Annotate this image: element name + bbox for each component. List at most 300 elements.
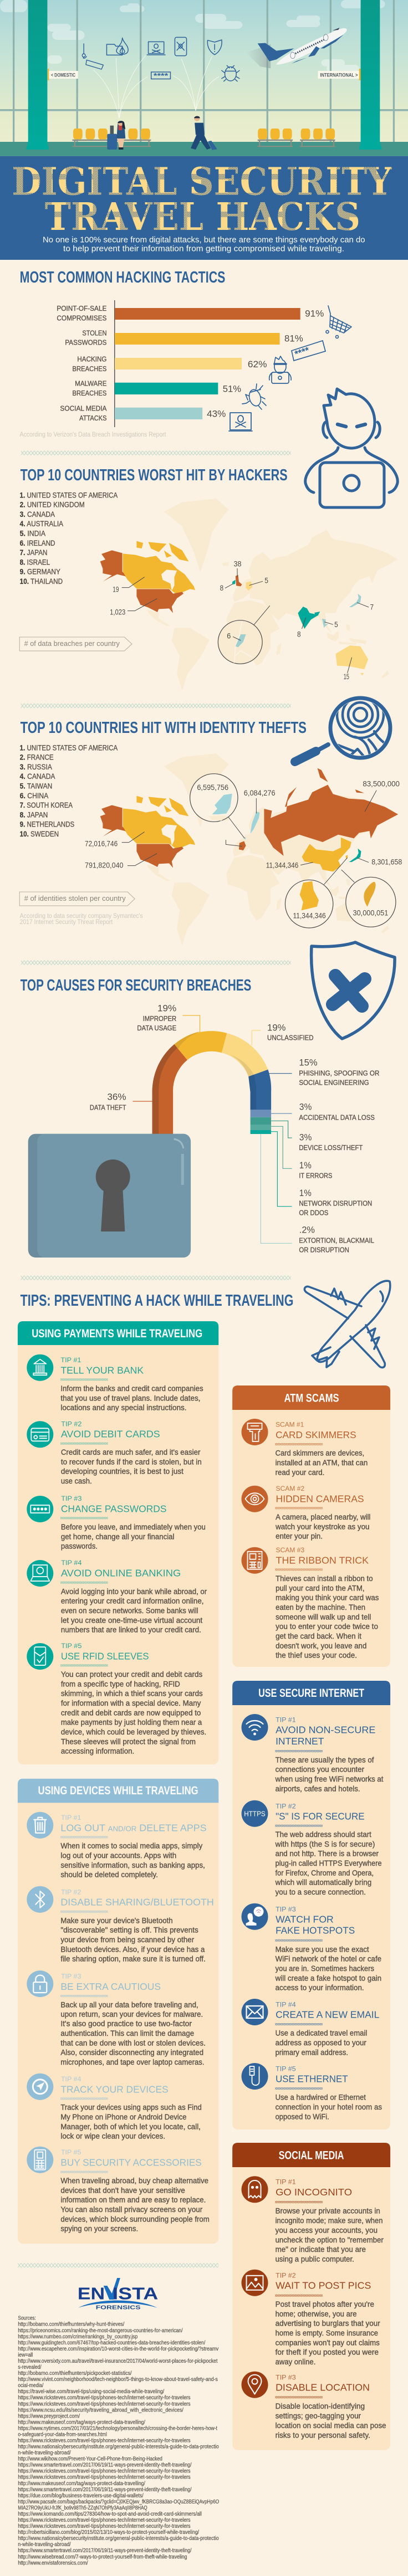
section: countries hit with identity thefts [19, 718, 402, 946]
illustration: big hacker [305, 389, 397, 507]
subtitle: to help prevent their information from getting compromised while traveling. [63, 245, 344, 253]
sources list: http://www.nationalcybersecurityinstitute.org/general-public-interests/a-guide-to-data-protectio [18, 2535, 219, 2542]
heading: TOP CAUSES FOR SECURITY BREACHES [21, 976, 251, 994]
tip 5: use rfid sleeves: skimming, in which a thief scans your cards [61, 1690, 203, 1698]
inset: taiwan [341, 870, 396, 927]
tip 1: avoid non-secure internet: airports, cafes and hotels. [276, 1785, 360, 1793]
tip 2: wait to post pics: Post travel photos after you're [276, 2300, 374, 2309]
chart labels: DATA USAGE [137, 1025, 176, 1033]
source note: 2017 Internet Security Threat Report [20, 918, 113, 926]
sources list: https://priceonomics.com/ranking-the-most-dangerous-countries-for-american/ [18, 2327, 183, 2333]
tip 1: go incognito: using a public computer. [276, 2255, 354, 2264]
icon: https badge: HTTPS [244, 1810, 266, 1818]
heading: TOP 10 COUNTRIES HIT WITH IDENTITY THEFTS [21, 718, 307, 736]
tip 3: be extra cautious: BE EXTRA CAUTIOUS [60, 1982, 161, 1992]
tip 3: disable location: risks to your personal safety. [276, 2431, 370, 2440]
icon: phone handset [27, 2147, 53, 2173]
tip 1: tell your bank [27, 1354, 203, 1413]
tip 4: avoid online banking: let you create one-time-use virtual account [61, 1617, 202, 1625]
tip 5: use rfid sleeves: credit and debit cards are now equipped to [61, 1709, 201, 1717]
sources list: MIA27RO9yUkU-frJfK_bo9v98Th5-ZZqN7OhPfy3AaAqII8P8HAQ [18, 2505, 147, 2511]
tip 2: disable sharing/bluetooth: DISABLE SHARING/BLUETOOTH [60, 1897, 214, 1907]
tip 3: change passwords: get home, change all your financial [61, 1533, 174, 1541]
icon: bank [27, 1354, 53, 1381]
tip 2: s is for secure: and not http. There is a browser [276, 1850, 379, 1859]
tip 5: use rfid sleeves: USE RFID SLEEVES [61, 1651, 149, 1661]
icon: online bank [27, 1560, 53, 1587]
legend tag: data breaches: # of data breaches per country [24, 640, 120, 648]
scam 1: card skimmers: read your card. [276, 1469, 324, 1477]
tip 3: watch for fake hotspots: WATCH FOR [276, 1914, 334, 1925]
scam 2: hidden cameras: A camera, placed nearby, will [276, 1513, 370, 1522]
scam 3: the ribbon trick: the thief uses your code. [276, 1651, 357, 1660]
icon: ethernet cable [242, 2063, 268, 2090]
tip 1: avoid non-secure internet: connections you encounter [276, 1766, 365, 1774]
icon: trash can [27, 1812, 53, 1839]
panel header [18, 1321, 218, 1345]
sources list: http://www.makeuseof.com/tag/ways-protect-data-travelling/ [18, 2419, 146, 2425]
tip 4: create a new email: address as opposed to your [276, 2039, 367, 2048]
logo: envista forensics: EN [78, 2285, 105, 2303]
tip 3: be extra cautious: upon return, scan your devices for malware. [60, 2010, 203, 2019]
tip 3: disable location: DISABLE LOCATION [276, 2382, 370, 2393]
world map: data breaches: 1,023 [110, 608, 125, 617]
tip 4: create a new email [242, 1999, 380, 2057]
chart labels: DEVICE LOSS/THEFT [299, 1145, 363, 1152]
sources list: https://www.ricksteves.com/travel-tips/phones-tech/internet-security-for-travelers [18, 2394, 191, 2401]
sources list: http://www.pacsafe.com/bags/backpacks/?gclid=Cj0KEQjwv_fKBRCG8a3ao-OQuZ8BEiQAvpHp6O [18, 2498, 219, 2505]
tip 5: buy security accessories: TIP #5 [61, 2149, 81, 2156]
tip 2: avoid debit cards: AVOID DEBIT CARDS [61, 1429, 160, 1440]
tip 3: be extra cautious: It's also good practice to use two-factor [60, 2020, 192, 2029]
ranked list: 2. FRANCE [20, 753, 54, 762]
title line 1: DIGITAL SECURITY [12, 160, 392, 204]
chart labels: SOCIAL ENGINEERING [299, 1079, 369, 1087]
callout lines [132, 1015, 292, 1243]
scam 3: the ribbon trick: you to enter your code twice to [276, 1623, 378, 1631]
ranked list: 10. SWEDEN [20, 830, 59, 839]
logo: envista forensics [78, 2278, 158, 2311]
chart labels: .2% [299, 1224, 315, 1235]
tip 1: log out and/or delete apps: log out of your accounts. Apps with [60, 1851, 176, 1860]
tip 2: disable sharing/bluetooth: TIP #2 [61, 1889, 81, 1896]
icon: tilted password box: **** [293, 345, 311, 360]
sources list: n-while-traveling-abroad/ [18, 2541, 72, 2548]
sources list: http://www.nationalcybersecurityinstitute.org/general-public-interests/a-guide-to-data-protectio [18, 2444, 219, 2450]
tip 1: log out and/or delete apps: sensitive information, such as banking apps, [60, 1861, 205, 1870]
bar chart [57, 300, 324, 427]
world map: identity thefts: 11,344,346 [266, 861, 299, 870]
tip 2: s is for secure: with https (the S is for secure) [274, 1840, 375, 1849]
tip 5: buy security accessories: When traveling abroad, buy cheap alternative [60, 2177, 208, 2185]
tip 5: use rfid sleeves: These sleeves will protect the signal from [61, 1738, 196, 1746]
ranked list: 6. IRELAND [20, 539, 55, 548]
tip 5: buy security accessories [27, 2147, 210, 2234]
scam 1: card skimmers: CARD SKIMMERS [276, 1430, 356, 1440]
section: countries worst hit by hackers [19, 465, 398, 691]
subtitle [43, 236, 365, 253]
title band [0, 156, 408, 260]
world map: data breaches: 5 [264, 577, 268, 586]
tip 5: use ethernet: connection in your hotel room as [276, 2103, 382, 2112]
tip 1: go incognito: Browse your private accounts in [276, 2207, 380, 2216]
bar chart: STOLEN [82, 330, 106, 337]
ranked list: 9. GERMANY [20, 568, 60, 577]
tip 1: avoid non-secure internet: These are usually the types of [276, 1756, 374, 1764]
icon: rfid sleeve [27, 1643, 53, 1670]
tip 5: use rfid sleeves: accessing information. [61, 1747, 134, 1756]
icon: bluetooth [27, 1886, 53, 1913]
panel header [232, 1681, 390, 1705]
tip 3: be extra cautious: authentication. This can limit the damage [60, 2029, 194, 2038]
world map: identity thefts: 11,344,346 [293, 912, 326, 920]
tip 1: go incognito: you access your accounts, you [276, 2226, 378, 2235]
tip 4: avoid online banking: Avoid logging into your bank while abroad, or [61, 1588, 207, 1596]
sources list: http://www.wisebread.com/7-ways-to-protect-yourself-from-theft-while-traveling [18, 2553, 187, 2560]
bar chart: 62% [248, 359, 267, 370]
panel: use secure internet [232, 1681, 390, 2129]
tip 1: tell your bank: Inform the banks and credit card companies [60, 1384, 203, 1393]
sources list: https://www.ricksteves.com/travel-tips/phones-tech/internet-security-for-travelers [18, 2400, 191, 2407]
header illustration: airport terminal [0, 0, 408, 156]
chart labels: 1% [299, 1188, 312, 1198]
tip 3: disable location: Disable location-identifying [276, 2402, 365, 2411]
scam 2: hidden cameras: SCAM #2 [276, 1485, 304, 1492]
chart labels: 1% [299, 1160, 312, 1171]
section: top causes for security breaches [21, 976, 379, 1258]
scam 2: hidden cameras: watch your keystroke as you [275, 1523, 370, 1531]
sources list: https://www.ricksteves.com/travel-tips/phones-tech/internet-security-for-travelers [18, 2468, 191, 2474]
ranked list: 2. UNITED KINGDOM [20, 501, 85, 509]
scam 3: the ribbon trick: doesn't work, you leave and [276, 1642, 367, 1650]
heading: MOST COMMON HACKING TACTICS [20, 268, 225, 286]
logo: envista forensics: FORENSICS [96, 2305, 140, 2311]
chart labels: ACCIDENTAL DATA LOSS [299, 1114, 375, 1122]
tip 2: s is for secure: which will automatically bring [274, 1879, 371, 1887]
scam 3: the ribbon trick: SCAM #3 [276, 1547, 304, 1554]
world map: data breaches: 38 [234, 560, 242, 569]
icon: password field: **** [154, 73, 168, 80]
tip 3: be extra cautious: that can be done with lost or stolen devices. [60, 2039, 206, 2048]
tip 2: wait to post pics: TIP #2 [276, 2272, 296, 2279]
panel header: USING DEVICES WHILE TRAVELING [38, 1784, 198, 1797]
tip 3: watch for fake hotspots: FAKE HOTSPOTS [276, 1925, 355, 1936]
icon: small hacker [269, 356, 291, 383]
tip 5: use rfid sleeves: from a specific type of hacking, RFID [61, 1680, 180, 1689]
icon: phishing hook with password tag [82, 44, 103, 69]
sources list: http://robertsicillano.com/blog/2015/02/13/10-ways-to-protect-yourself-while-traveling/ [18, 2529, 200, 2536]
tip 2: s is for secure: plug-in called HTTPS Everywhere [276, 1859, 382, 1868]
scam 3: the ribbon trick: Thieves can install a ribbon to [276, 1574, 373, 1583]
tip 3: change passwords: CHANGE PASSWORDS [61, 1503, 166, 1514]
world map: data breaches: 15 [344, 673, 349, 681]
sources list: ocial-media/ [18, 2382, 44, 2389]
icon: bug [222, 65, 239, 81]
panel header: USING PAYMENTS WHILE TRAVELING [32, 1327, 202, 1340]
connection lines [94, 55, 219, 118]
illustration: airplane outline [304, 1281, 390, 1367]
bar chart: MALWARE [75, 380, 107, 388]
ranked list: 3. CANADA [20, 510, 55, 519]
icon: map pin [242, 2372, 268, 2398]
illustration: shield with x [312, 942, 395, 1039]
icon: laptop with skull [147, 42, 165, 55]
tip 2: disable sharing/bluetooth: your device from being scanned by other [60, 1936, 195, 1944]
tip 1: tell your bank: TELL YOUR BANK [60, 1365, 144, 1376]
chart labels: 36% [107, 1091, 126, 1102]
tip 4: avoid online banking: entering your credit card information online, [61, 1597, 204, 1606]
tip 3: change passwords [27, 1495, 206, 1551]
padlock chart: shackle segments [152, 1031, 271, 1134]
tip 2: s is for secure: The web address should start [276, 1830, 371, 1839]
tip 2: avoid debit cards: Credit cards are much safer, and it's easier [61, 1448, 201, 1457]
tip 3: change passwords: Before you leave, and immediately when you [61, 1523, 206, 1532]
tip 5: use rfid sleeves: You can protect your credit and debit cards [61, 1670, 202, 1679]
chart labels: 19% [267, 1022, 286, 1033]
logo: envista forensics: ISTA [113, 2285, 158, 2303]
tip 1: avoid non-secure internet: when using free WiFi networks at [274, 1775, 383, 1784]
world map: identity thefts: 6,595,756 [197, 783, 228, 792]
icon: https badge [242, 1800, 268, 1827]
tip 1: tell your bank: TIP #1 [60, 1357, 81, 1364]
world map: data breaches: 6 [227, 632, 231, 641]
panel header: USE SECURE INTERNET [258, 1687, 364, 1700]
tip 3: watch for fake hotspots: Make sure you use the exact [276, 1946, 369, 1954]
ranked list: 5. INDIA [20, 530, 45, 538]
tip 2: s is for secure: for Firefox, Chrome and Opera, [276, 1869, 374, 1877]
sources list: http://www.oversixty.com.au/travel/travel-insurance/2017/04/world-worst-places-for-pickpocket [18, 2358, 218, 2364]
ranked list: 7. JAPAN [20, 549, 47, 557]
icon: password dots [27, 1496, 53, 1522]
tip 2: s is for secure: TIP #2 [276, 1803, 296, 1810]
sources list: https://www.smartertravel.com/2017/06/19/11-ways-prevent-identity-theft-traveling/ [18, 2462, 192, 2468]
tip 5: use rfid sleeves: TIP #5 [61, 1643, 81, 1650]
tip 5: use ethernet: Use a hardwired or Ethernet [276, 2093, 366, 2102]
tip 2: avoid debit cards: use cash. [61, 1477, 92, 1486]
bar chart: 81% [284, 333, 303, 344]
panel: atm scams [232, 1386, 390, 1667]
tip 4: track your devices: My Phone on iPhone or Android Device [60, 2113, 187, 2122]
tip 4: avoid online banking [27, 1559, 207, 1635]
ranked list: 8. JAPAN [20, 811, 48, 819]
sources list: https://www.ricksteves.com/travel-tips/phones-tech/internet-security-for-travelers [18, 2438, 191, 2444]
scam 1: card skimmers: SCAM #1 [276, 1421, 304, 1428]
ranked list: 3. RUSSIA [20, 763, 52, 772]
scam 3: the ribbon trick: eaten by the machine. Then [276, 1603, 365, 1612]
icon: shopping cart [326, 306, 351, 338]
tip 1: go incognito: uncheck the option to "remember [276, 2236, 384, 2245]
ranked list [20, 491, 118, 586]
sources list: https://due.com/blog/business-travelers-use-digital-wallets/ [18, 2492, 144, 2498]
tip 2: s is for secure: "S" IS FOR SECURE [276, 1811, 365, 1821]
bar chart: 91% [305, 308, 324, 319]
icon: password field [151, 72, 170, 80]
sources list: https://www.nytimes.com/2017/03/21/technology/personaltech/crossing-the-border-heres-how-t [18, 2425, 218, 2431]
chart labels: EXTORTION, BLACKMAIL [299, 1237, 374, 1245]
scam 3: the ribbon trick: get the card back. When it [276, 1632, 361, 1641]
sources list: http://bobarno.com/thiefhunters/why-hunt-thieves/ [18, 2321, 125, 2327]
bar chart: COMPROMISES [57, 315, 107, 322]
column left [26, 0, 49, 150]
world map: identity thefts: 8,301,658 [371, 858, 402, 867]
ranked list: 10. THAILAND [20, 577, 63, 586]
scam 2: hidden cameras [242, 1485, 370, 1541]
tip 4: track your devices: TRACK YOUR DEVICES [60, 2084, 169, 2095]
chart labels: OR DDOS [299, 1209, 329, 1218]
tip 5: use ethernet: USE ETHERNET [276, 2074, 348, 2085]
sources list: https://www.numbeo.com/crime/rankings_by_country.jsp [18, 2333, 137, 2339]
ranked list: 1. UNITED STATES OF AMERICA [20, 491, 118, 500]
world map: identity thefts: 6,084,276 [244, 789, 276, 798]
tip 1: log out and/or delete apps: should be deleted completely. [60, 1871, 158, 1880]
bar chart: BREACHES [72, 366, 107, 373]
tip 2: wait to post pics: away online. [276, 2358, 315, 2367]
sign: international [318, 69, 361, 80]
legend tag: identities: # of identities stolen per country [24, 895, 126, 903]
sources list [18, 2315, 219, 2566]
world map: identity thefts: 30,000,051 [353, 909, 388, 917]
world map: data breaches: 19 [113, 586, 119, 594]
world map: data breaches [100, 499, 398, 691]
sources list: https://www.ricksteves.com/travel-tips/phones-tech/internet-security-for-travelers [18, 2517, 191, 2523]
scam 3: the ribbon trick: making you think your card was [276, 1594, 379, 1603]
icon: wifi [242, 1714, 268, 1741]
icon: card skimmer [242, 1419, 268, 1445]
ranked list: 4. AUSTRALIA [20, 520, 63, 528]
tip 4: track your devices: Manager, both of which let you locate, call, [60, 2123, 201, 2131]
icon: ghost [242, 2176, 268, 2203]
bar chart: ATTACKS [79, 415, 107, 423]
tip 4: avoid online banking: TIP #4 [61, 1559, 81, 1567]
tip 3: be extra cautious: Back up all your data before traveling and, [60, 2001, 198, 2009]
panel header [232, 2143, 390, 2167]
icon: hacked phone [175, 37, 187, 56]
sources list: o-safeguard-your-data-from-searches.html [18, 2431, 107, 2438]
tip 4: create a new email: Use a dedicated travel email [276, 2029, 367, 2038]
section: tips heading: TIPS: PREVENTING A HACK WHILE TRAVELING [21, 1291, 293, 1309]
scam 3: the ribbon trick [242, 1547, 379, 1660]
chart labels: 3% [299, 1132, 312, 1142]
icon: eye [242, 1486, 268, 1512]
scam 1: card skimmers: installed at an ATM, that can [276, 1459, 368, 1467]
tip 4: track your devices: TIP #4 [61, 2076, 81, 2083]
column right [359, 0, 382, 150]
tip 5: buy security accessories: devices that don't have your sensitive [60, 2187, 185, 2195]
icon: atm keypad [242, 1547, 268, 1574]
tip 4: avoid online banking: even on secure networks. Some banks will [61, 1607, 198, 1615]
tip 1: tell your bank: locations and any special instructions. [60, 1404, 187, 1413]
tip 2: disable sharing/bluetooth: Bluetooth devices. Also, if your device has a [60, 1946, 205, 1954]
chart labels [90, 1003, 379, 1255]
tip 3: disable location [242, 2372, 386, 2440]
illustration: fingerprint magnifier [295, 691, 390, 762]
panel header: SOCIAL MEDIA [279, 2149, 344, 2162]
tip 2: disable sharing/bluetooth [27, 1886, 214, 1964]
icon: padlock [27, 1971, 53, 1997]
icon: folder on fire [106, 38, 128, 55]
sources list: iew=all [18, 2352, 33, 2358]
tip 2: wait to post pics: advertising to burglars that your [276, 2320, 380, 2328]
tip 2: avoid debit cards [27, 1420, 202, 1486]
sources list: n-while-traveling-abroad/ [18, 2450, 72, 2456]
icon: small bug [242, 384, 266, 409]
inset: netherlands [190, 774, 244, 838]
chart labels: PHISHING, SPOOFING OR [299, 1070, 379, 1078]
scam 1: card skimmers [242, 1419, 368, 1477]
tip 2: avoid debit cards: TIP #2 [61, 1420, 81, 1428]
tip 1: log out and/or delete apps: TIP #1 [61, 1814, 81, 1821]
bar chart: PASSWORDS [65, 339, 107, 347]
tip 1: avoid non-secure internet [242, 1714, 383, 1793]
ranked list: 7. SOUTH KOREA [20, 802, 73, 810]
tip 5: use ethernet: opposed to WiFi. [276, 2113, 329, 2121]
section: most common hacking tactics [20, 268, 351, 438]
sign: domestic: < DOMESTIC [51, 72, 76, 78]
tip 1: go incognito: TIP #1 [276, 2178, 296, 2185]
tip 5: use rfid sleeves [27, 1643, 206, 1756]
tip 1: avoid non-secure internet: TIP #1 [276, 1716, 296, 1723]
tip 5: use rfid sleeves: device, which could be leveraged by thieves. [61, 1728, 206, 1737]
tip 2: wait to post pics: home is empty. Some insurance [276, 2329, 378, 2338]
tip 5: buy security accessories: You can also nstall privacy screens on your [60, 2205, 203, 2214]
sources list: https://www.smartertravel.com/2017/06/19/11-ways-prevent-identity-theft-traveling/ [18, 2547, 192, 2554]
tip 4: avoid online banking: numbers that are linked to your credit card. [61, 1626, 201, 1635]
scam 2: hidden cameras: HIDDEN CAMERAS [276, 1494, 364, 1504]
sources list: Sources: [18, 2315, 36, 2321]
sources list: https://www.ncsu.edu/its/security/traveling_abroad_with_electronic_devices/ [18, 2406, 184, 2413]
tip 2: wait to post pics: companies won't pay out claims [276, 2339, 380, 2347]
tip 3: watch for fake hotspots: you are in. Sometimes hackers [276, 1964, 374, 1973]
tip 4: track your devices [27, 2074, 202, 2141]
magnifier inset: israel [218, 605, 270, 664]
bar chart: 51% [223, 383, 241, 394]
tip 5: buy security accessories: information on them and are easy to replace. [60, 2196, 206, 2205]
tip 1: log out and/or delete apps [27, 1812, 207, 1880]
tip 1: go incognito [242, 2176, 384, 2264]
tip 3: be extra cautious [27, 1971, 206, 2067]
chart labels: DATA THEFT [90, 1104, 126, 1112]
tip 4: avoid online banking: AVOID ONLINE BANKING [61, 1568, 181, 1578]
tip 4: create a new email: primary email address. [276, 2049, 348, 2057]
world map: identity thefts: 791,820,040 [85, 861, 124, 870]
sources list: https://www.ricksteves.com/travel-tips/phones-tech/internet-security-for-travelers [18, 2523, 191, 2529]
tip 1: log out and/or delete apps: When it comes to social media apps, simply [60, 1842, 203, 1851]
inset: south korea [285, 858, 348, 928]
tip 3: disable location: settings; geo-tagging your [276, 2412, 361, 2421]
panel: using payments while traveling [18, 1321, 218, 1764]
tip 5: use rfid sleeves: make payments by just holding them near a [61, 1718, 202, 1727]
ranked list: 1. UNITED STATES OF AMERICA [20, 744, 118, 752]
sources list: https://www.ricksteves.com/travel-tips/phones-tech/internet-security-for-travelers [18, 2474, 191, 2480]
bar chart: 43% [207, 408, 226, 419]
chart labels: IMPROPER [143, 1015, 176, 1023]
tip 2: wait to post pics: home; otherwise, you are [276, 2310, 357, 2318]
icon: navigation compass [27, 2074, 53, 2100]
source note [20, 912, 143, 926]
scam 1: card skimmers: Card skimmers are devices, [276, 1449, 364, 1458]
ranked list: 8. ISRAEL [20, 558, 50, 567]
sign: domestic [48, 69, 78, 80]
tip 5: buy security accessories: devices, which block surrounding people from [60, 2215, 210, 2224]
tip 4: track your devices: Track your devices using apps such as Find [60, 2103, 202, 2112]
tip 4: create a new email: CREATE A NEW EMAIL [276, 2009, 380, 2020]
tip 2: disable sharing/bluetooth: Make sure your device's Bluetooth [60, 1917, 173, 1925]
bar chart: BREACHES [72, 390, 107, 398]
title line 2: TRAVEL HACKS [45, 194, 360, 239]
tip 3: watch for fake hotspots [242, 1903, 381, 1993]
chart labels: UNCLASSIFIED [267, 1034, 314, 1043]
tip 3: disable location: TIP #3 [276, 2374, 296, 2381]
